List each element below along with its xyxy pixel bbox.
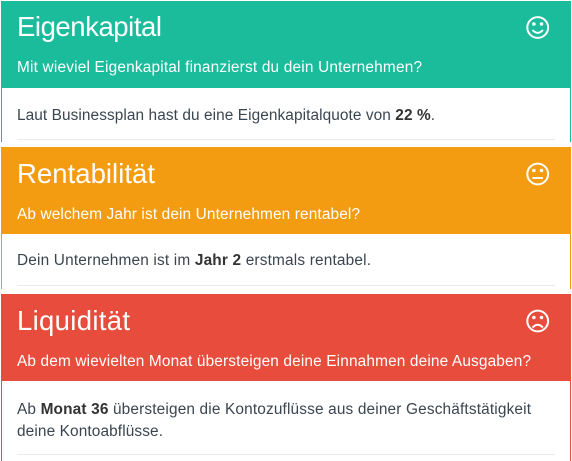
answer: Eigenkapital: Laut Businessplan hast du eine Eigenkapitalquote von 22 %. bbox=[17, 107, 435, 124]
question: Liquidität: Ab dem wievielten Monat übersteigen deine Einnahmen deine Ausgaben? bbox=[17, 353, 531, 370]
answer: Rentabilität: Dein Unternehmen ist im Jahr 2 erstmals rentabel. bbox=[17, 252, 371, 269]
answer: Liquidität: Ab Monat 36 übersteigen die Kontozuflüsse aus deiner Geschäftstätigkeit bbox=[17, 401, 532, 418]
heading: Eigenkapital: Eigenkapital bbox=[17, 11, 162, 42]
answer: Liquidität: deine Kontoabflüsse. bbox=[17, 423, 163, 440]
question: Eigenkapital: Mit wieviel Eigenkapital finanzierst du dein Unternehmen? bbox=[17, 59, 422, 76]
panel: Eigenkapital bbox=[1, 1, 571, 142]
panel: Liquidität bbox=[1, 294, 571, 461]
heading: Liquidität: Liquidität bbox=[17, 305, 130, 336]
icon: neutral face bbox=[527, 164, 548, 184]
question: Rentabilität: Ab welchem Jahr ist dein Unternehmen rentabel? bbox=[17, 206, 360, 223]
heading: Rentabilität: Rentabilität bbox=[17, 158, 155, 189]
panel: Rentabilität bbox=[1, 147, 571, 289]
icon: happy face bbox=[527, 17, 548, 38]
answer: Liquidität bbox=[17, 401, 532, 440]
icon: sad face bbox=[527, 311, 548, 331]
